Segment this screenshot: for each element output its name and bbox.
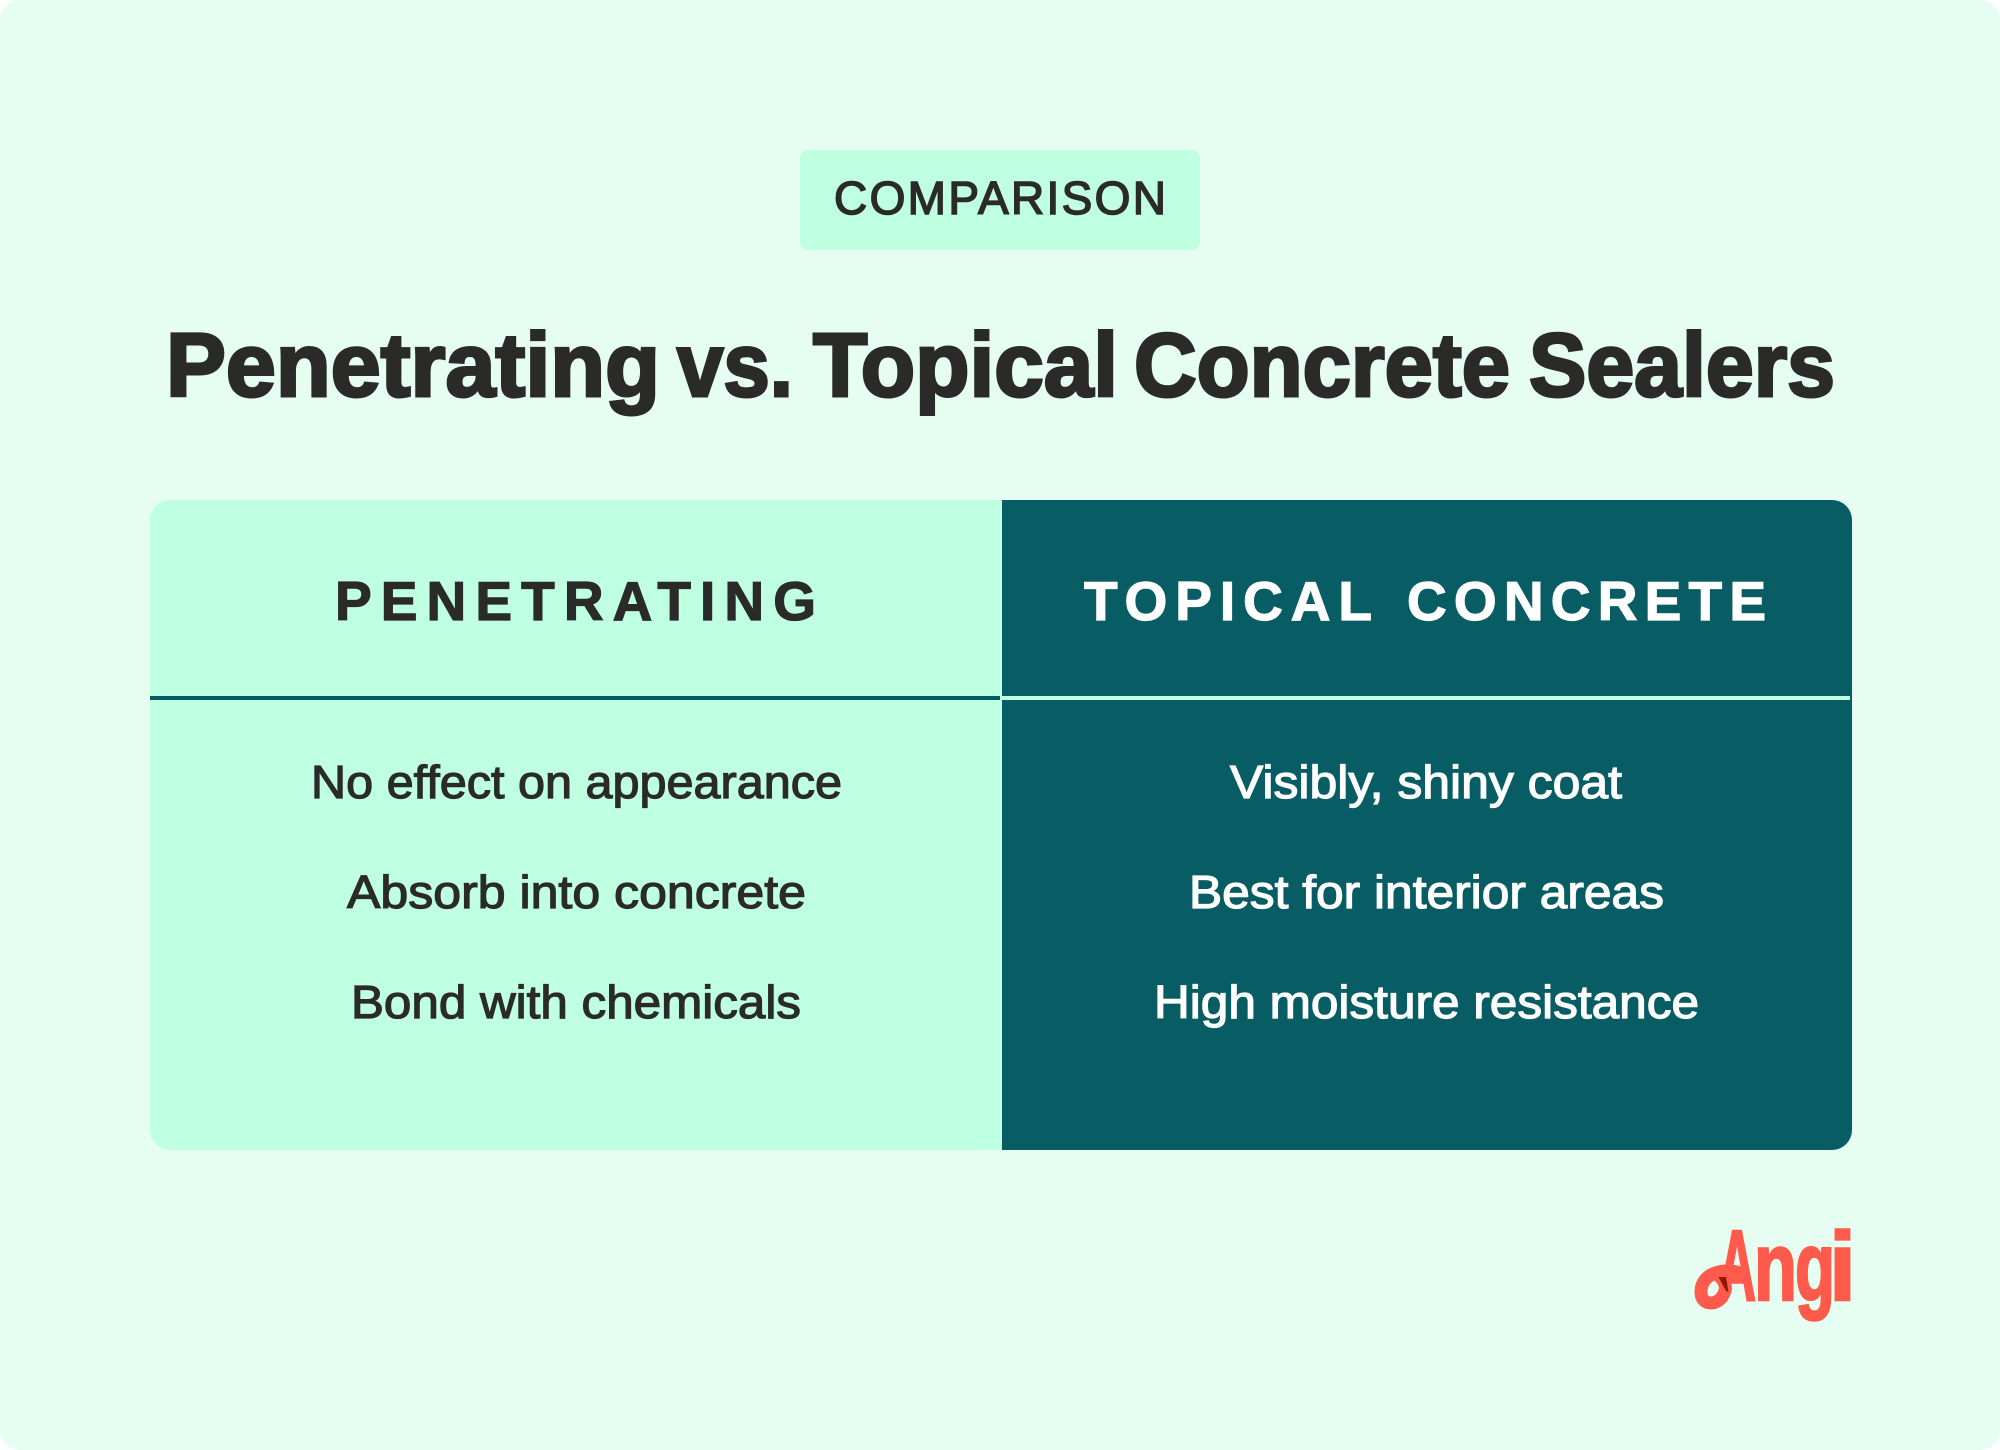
logo: Angi [1701, 1210, 1856, 1322]
title: Concrete [1134, 316, 1510, 416]
list: topical traits: Visibly, shiny coat [1230, 756, 1622, 808]
panel: topical concrete [1002, 500, 1852, 1150]
logo: Angi: A [1718, 1210, 1756, 1322]
heading: topical concrete [1084, 570, 1766, 632]
panel: penetrating [150, 500, 1002, 1150]
list: penetrating traits: Bond with chemicals [351, 976, 801, 1028]
logo: Angi: n [1754, 1212, 1797, 1321]
tag: comparison [800, 150, 1200, 250]
title: vs. [677, 316, 793, 416]
divider line: penetrating [150, 696, 1000, 700]
list: topical traits [1154, 756, 1699, 1028]
title: Sealers [1529, 316, 1835, 416]
title [166, 316, 1835, 416]
heading: topical concrete: TOPICAL [1084, 570, 1372, 632]
list: topical traits: High moisture resistance [1154, 976, 1699, 1028]
heading: topical concrete: CONCRETE [1407, 570, 1766, 632]
list: penetrating traits [311, 756, 842, 1028]
list: penetrating traits: No effect on appearance [311, 756, 842, 808]
heading: penetrating: PENETRATING [335, 570, 816, 632]
list: penetrating traits: Absorb into concrete [347, 866, 806, 918]
tag: comparison: COMPARISON [834, 172, 1166, 224]
title: Penetrating [166, 316, 660, 416]
divider line: topical concrete [1002, 696, 1850, 700]
title: Topical [813, 316, 1118, 416]
logo: Angi: i [1829, 1212, 1856, 1321]
list: topical traits: Best for interior areas [1189, 866, 1664, 918]
logo: Angi: g [1795, 1212, 1835, 1321]
